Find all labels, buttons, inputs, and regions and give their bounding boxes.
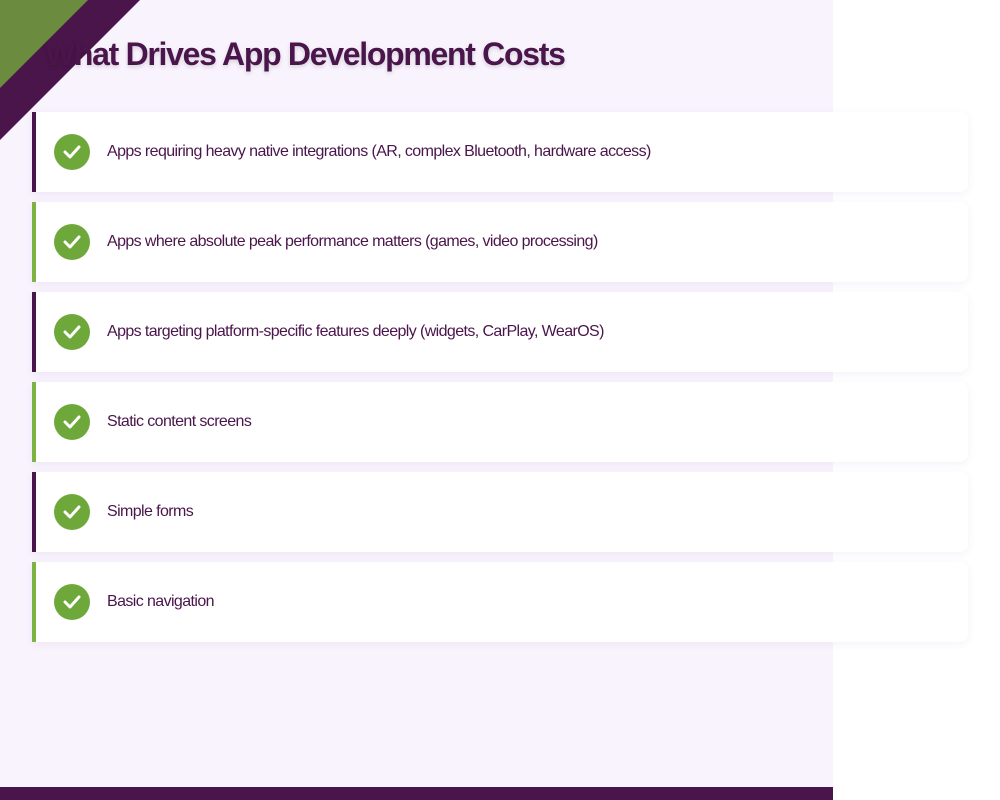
card 3 bbox=[32, 292, 968, 372]
card 4 bbox=[32, 382, 968, 462]
bottom bar bbox=[0, 787, 833, 800]
title: What Drives App Development Costs bbox=[45, 36, 565, 72]
corner decoration bbox=[0, 0, 140, 140]
card 2: Apps where absolute peak performance matters (games, video processing) bbox=[107, 233, 598, 250]
card 6: Basic navigation bbox=[107, 593, 214, 610]
card 2 bbox=[32, 202, 968, 282]
card 3: Apps targeting platform-specific features deeply (widgets, CarPlay, WearOS) bbox=[107, 323, 604, 340]
card 5: Simple forms bbox=[107, 503, 193, 520]
card 4: Static content screens bbox=[107, 413, 251, 430]
card 6 bbox=[32, 562, 968, 642]
card 1: Apps requiring heavy native integrations (AR, complex Bluetooth, hardware access) bbox=[107, 143, 651, 160]
card 5 bbox=[32, 472, 968, 552]
card 1 bbox=[32, 112, 968, 192]
